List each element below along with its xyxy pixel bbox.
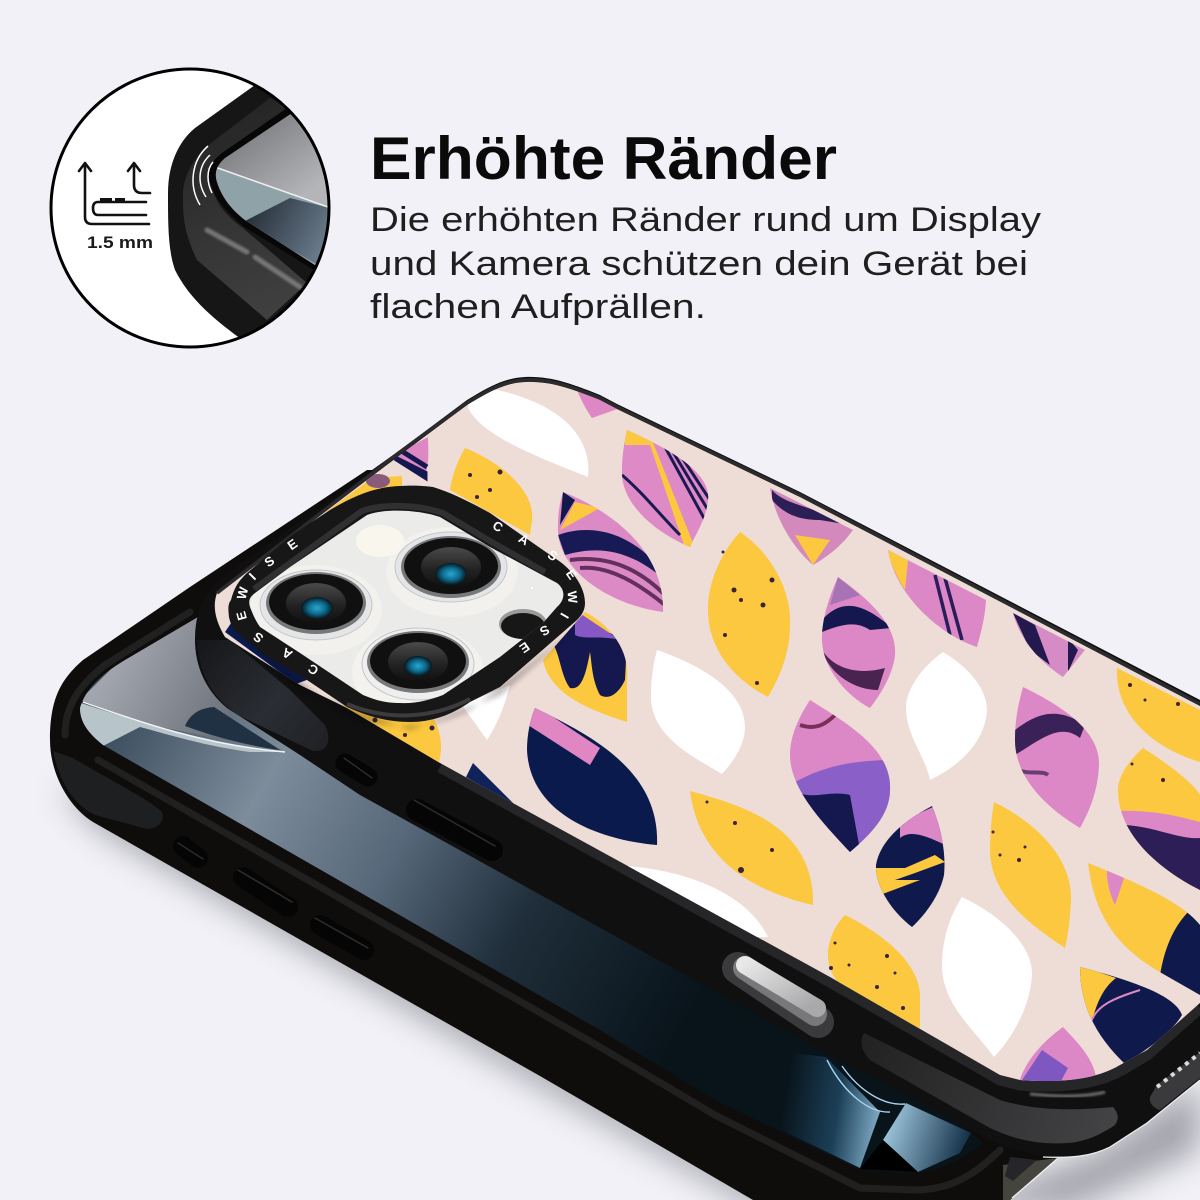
leaf: yellow behind camera top (326, 476, 402, 512)
leaf: marbled pink with yellow stripe (622, 430, 708, 547)
camera: CASEWISE lettering: C (305, 660, 321, 678)
leaf: white lower (628, 866, 768, 937)
leaf: white below camera (462, 685, 510, 740)
inset circle: raised edge detail (51, 69, 345, 347)
leaf: marbled pink and navy (558, 492, 663, 612)
description text: Die erhöhten Ränder rund um Display (370, 201, 1042, 239)
camera: ring soft shadow (229, 620, 577, 730)
camera: CASEWISE lettering: A (279, 644, 295, 662)
description text: flachen Aufprällen. (370, 288, 706, 326)
leaf: yellow lower right (990, 802, 1071, 948)
camera: CASEWISE lettering: S (545, 547, 561, 564)
icon: raised edge height diagram (79, 163, 150, 224)
leaf: pink navy upper right (1013, 613, 1085, 677)
leaf: small navy (466, 763, 514, 804)
back phone: case (50, 470, 1057, 1200)
camera: CASEWISE lettering: S (261, 553, 277, 570)
camera: CASEWISE lettering: E (284, 536, 300, 553)
label: 1.5 mm: 1.5 mm (87, 234, 153, 252)
leaf: yellow with marble band (1115, 745, 1200, 895)
camera: CASEWISE lettering: I (557, 610, 572, 621)
leaf: yellow and navy bottom right (1078, 965, 1184, 1067)
leaf: yellow large speckled (708, 532, 790, 697)
leaf: yellow below camera (340, 690, 441, 765)
camera: CASEWISE lettering: I (246, 570, 259, 583)
leaf: yellow bottom (828, 915, 920, 1028)
leaf: yellow top left (450, 448, 532, 535)
leaf: purple fragment behind camera top (366, 474, 390, 488)
camera: CASEWISE lettering: W (564, 590, 581, 605)
camera: CASEWISE lettering: E (517, 639, 533, 656)
back phone: side buttons (178, 843, 368, 950)
leaf: pink and navy marble (822, 577, 896, 708)
description text (370, 201, 1042, 326)
camera: CASEWISE lettering: W (234, 585, 252, 601)
phone case print: leaf pattern (190, 360, 1200, 1100)
camera: inner ring bevel (254, 506, 545, 589)
back phone: screen (80, 618, 982, 1173)
leaf: pink swirl (1015, 687, 1099, 828)
camera: lens 3 (362, 628, 474, 700)
camera: black ring (228, 486, 585, 722)
front phone: silver action button (738, 965, 818, 1022)
camera: CASEWISE lettering: S (250, 629, 266, 646)
leaf: pink and purple bottom (1020, 1027, 1096, 1081)
leaf: small navy and pink left (395, 437, 428, 477)
leaf: yellow top right (1117, 668, 1200, 762)
leaf: pink and purple marble (790, 700, 890, 852)
camera: CASEWISE lettering: E (563, 566, 580, 582)
leaf: navy with yellow streak (876, 806, 944, 927)
leaf: small pink top (578, 392, 617, 418)
camera: CASEWISE lettering: A (516, 531, 532, 549)
leaf: navy with pink band (527, 708, 658, 845)
front phone: case shell (195, 377, 1200, 1157)
front phone: mute switch port (344, 758, 372, 778)
camera: lens 2 (395, 532, 507, 602)
leaf: yellow with navy drips (543, 612, 628, 722)
front phone: thin top border (217, 380, 1200, 704)
leaf: white right (906, 652, 987, 780)
drop shadow under phones (60, 790, 1200, 1200)
leaf: yellow and navy right (1085, 860, 1200, 1000)
camera: CASEWISE lettering: E (233, 609, 250, 622)
leaf: pink top marbled edge (770, 488, 853, 565)
description text: und Kamera schützen dein Gerät bei (370, 245, 1028, 283)
camera: window and lenses (250, 510, 564, 704)
camera: ring lower edge highlight (347, 699, 470, 715)
speckles on yellow leaves (372, 470, 1180, 1010)
leaf: white bottom (942, 897, 1032, 1057)
front phone: side button (414, 800, 495, 850)
camera: CASEWISE lettering: C (490, 518, 506, 536)
camera: lens 1 (260, 570, 372, 640)
leaf: yellow diagonal speckled (690, 791, 813, 905)
leaf: pink top right (888, 550, 986, 647)
leaf: navy strip at camera edge (225, 623, 307, 684)
leaf: white centre (651, 650, 745, 774)
camera: CASEWISE lettering (233, 518, 581, 678)
title: Erhöhte Ränder (370, 125, 837, 192)
camera: CASEWISE lettering: S (537, 622, 552, 639)
leaf: white top (468, 385, 588, 477)
